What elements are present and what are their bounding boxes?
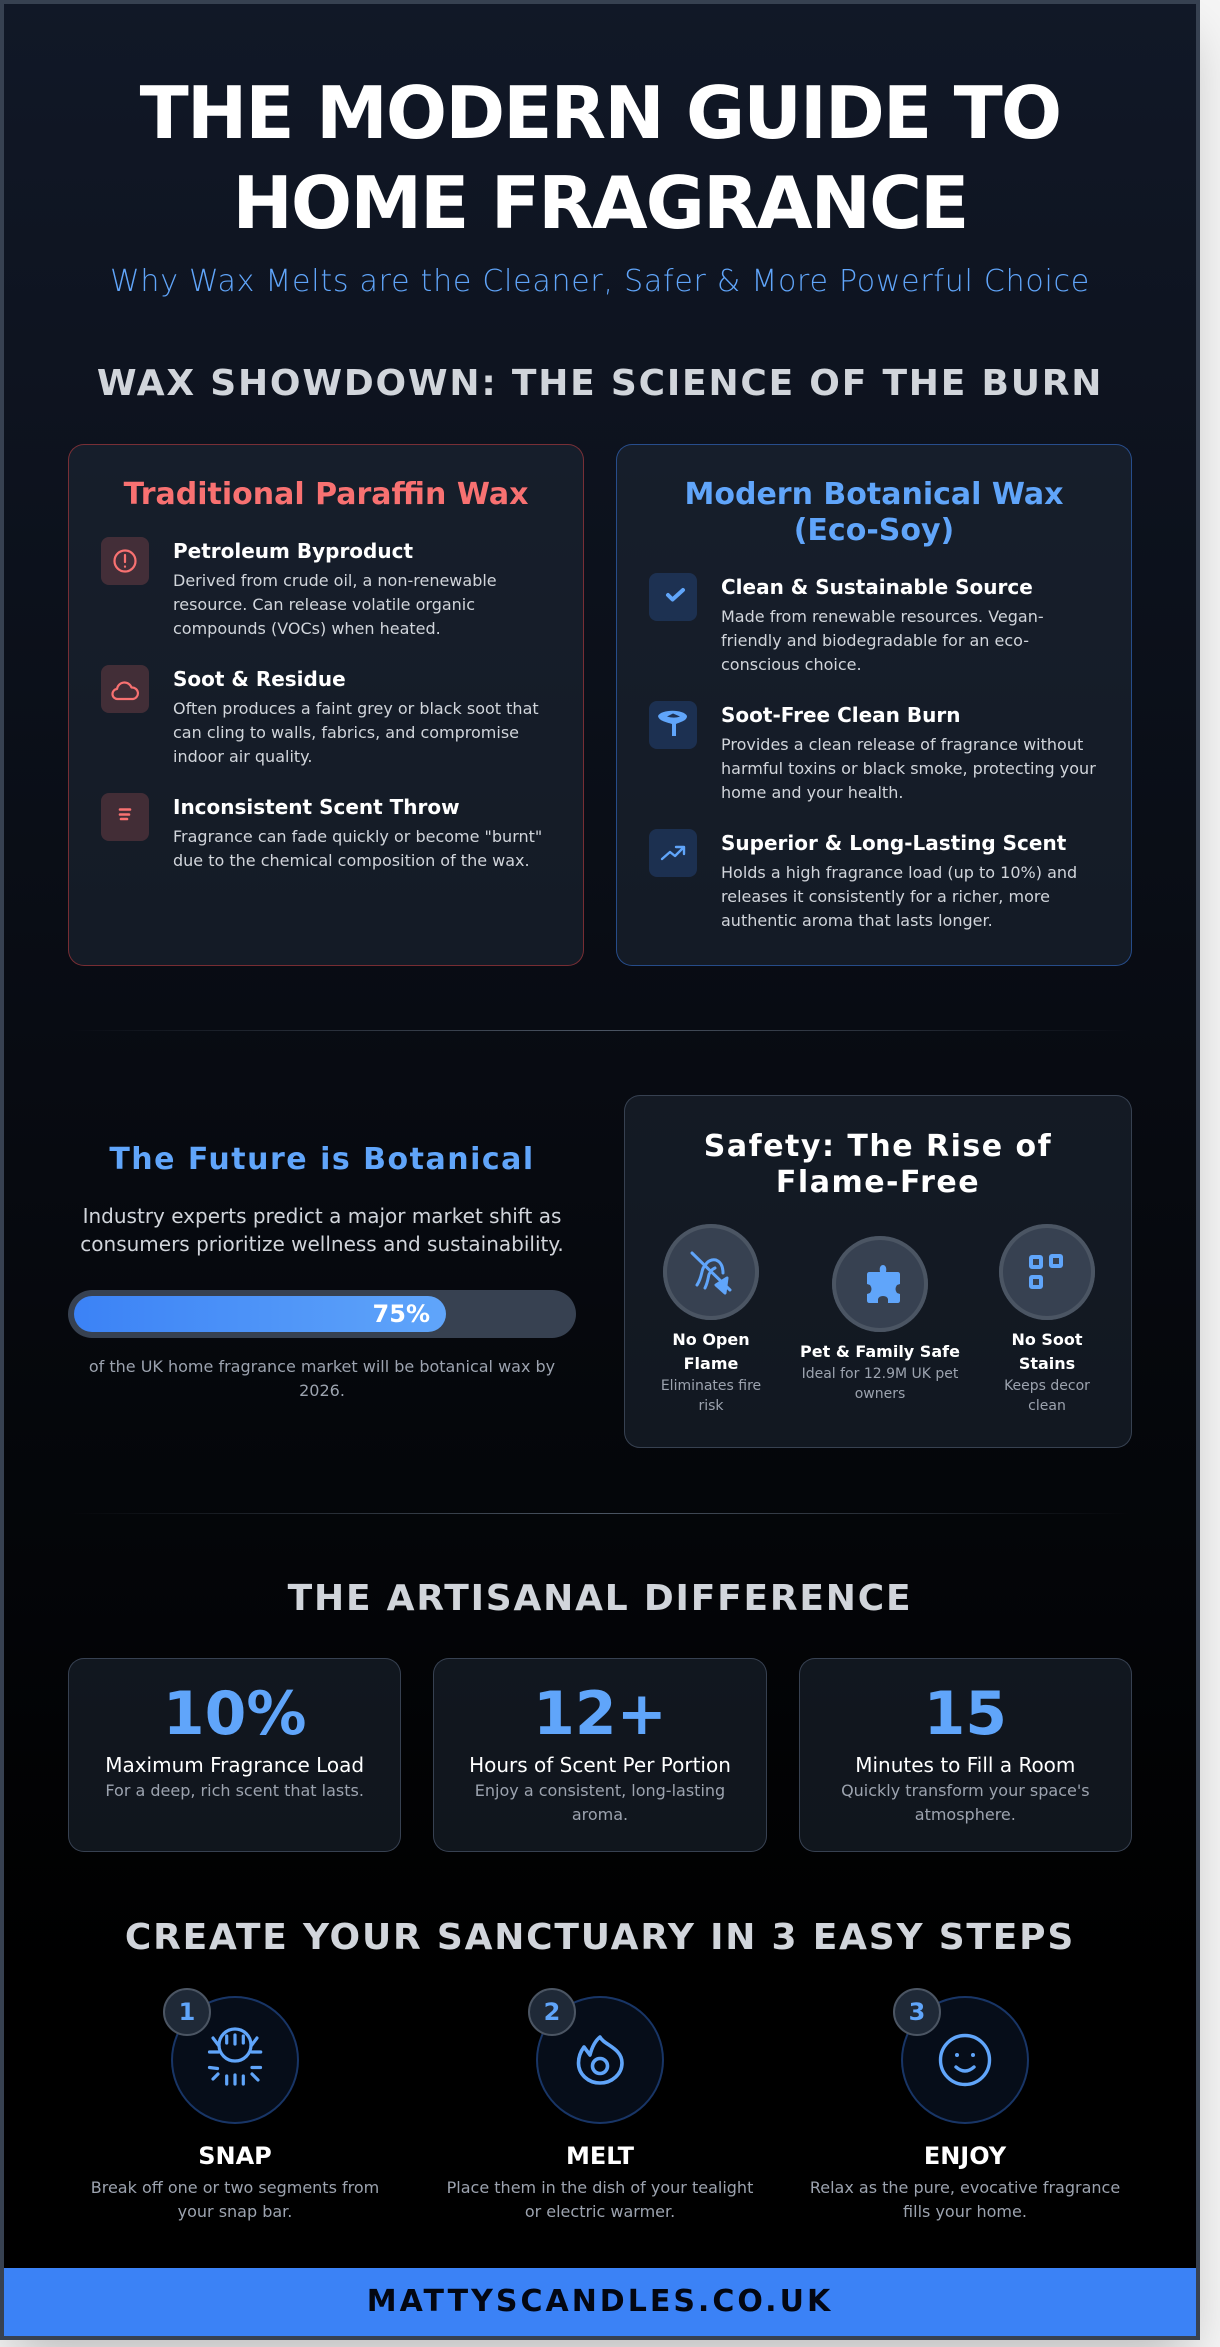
badge 2: 2 xyxy=(544,1998,560,2026)
note: Eliminates fire xyxy=(661,1378,761,1394)
icon: step 3 enjoy xyxy=(901,1996,1029,2124)
step 2 text xyxy=(447,2178,753,2221)
label xyxy=(672,1330,750,1373)
title: THE MODERN GUIDE TO xyxy=(140,71,1060,155)
note: Ideal for 12.9M UK pet xyxy=(802,1366,958,1382)
icon: step 1 snap xyxy=(171,1996,299,2124)
label: Stains xyxy=(1019,1354,1075,1373)
icon: step 2 melt xyxy=(536,1996,664,2124)
item description: home and your health. xyxy=(721,783,903,802)
percentage value: 75% xyxy=(373,1300,430,1328)
label xyxy=(1011,1330,1083,1373)
item description: Made from renewable resources. Vegan- xyxy=(721,607,1044,626)
safety heading: Flame-Free xyxy=(776,1165,980,1200)
stat label: Minutes to Fill a Room xyxy=(855,1753,1075,1777)
paraffin heading: Traditional Paraffin Wax xyxy=(124,477,528,512)
note xyxy=(802,1366,958,1402)
stat card: hours of scent xyxy=(433,1658,767,1852)
item description: Provides a clean release of fragrance without xyxy=(721,735,1083,754)
icon: exclamation circle xyxy=(101,537,149,585)
footer bar xyxy=(4,2268,1196,2336)
safety heading xyxy=(704,1129,1052,1200)
step 2 text: or electric warmer. xyxy=(525,2202,675,2221)
botanical heading: Modern Botanical Wax xyxy=(685,477,1063,512)
progress bar 75 percent xyxy=(68,1290,576,1338)
item description: friendly and biodegradable for an eco- xyxy=(721,631,1029,650)
step 3 text: Relax as the pure, evocative fragrance xyxy=(810,2178,1120,2197)
botanical heading: (Eco-Soy) xyxy=(794,513,954,548)
stat card: minutes to fill xyxy=(799,1658,1132,1852)
step 2 title: MELT xyxy=(566,2142,634,2170)
safety item: pet and family safe xyxy=(800,1236,960,1402)
step 3 text: fills your home. xyxy=(903,2202,1027,2221)
label: Flame xyxy=(684,1354,738,1373)
stat note: Quickly transform your space's xyxy=(841,1781,1090,1800)
market shift text xyxy=(80,1204,564,1256)
badge 2 xyxy=(528,1988,576,2036)
item heading: Petroleum Byproduct xyxy=(173,539,413,563)
safety item: no open flame xyxy=(661,1224,761,1414)
panel: modern botanical wax xyxy=(616,444,1132,966)
step 2 text: Place them in the dish of your tealight xyxy=(447,2178,753,2197)
item heading: Soot & Residue xyxy=(173,667,346,691)
item: clean and sustainable source xyxy=(649,573,1044,674)
panel: safety xyxy=(624,1095,1132,1448)
stat note xyxy=(475,1781,725,1824)
icon: fading lines xyxy=(101,793,149,841)
panel: traditional paraffin wax xyxy=(68,444,584,966)
panel: future is botanical xyxy=(68,1142,576,1400)
step 1 title: SNAP xyxy=(198,2142,272,2170)
item description: harmful toxins or black smoke, protecting your xyxy=(721,759,1096,778)
step 3 text xyxy=(810,2178,1120,2221)
item description: resource. Can release volatile organic xyxy=(173,595,475,614)
step 1 text xyxy=(91,2178,379,2221)
heading: wax showdown: WAX SHOWDOWN: THE SCIENCE OF THE BURN xyxy=(97,363,1103,404)
stat label: Hours of Scent Per Portion xyxy=(469,1753,731,1777)
item description: can cling to walls, fabrics, and compromise xyxy=(173,723,519,742)
badge 3 xyxy=(893,1988,941,2036)
item description: Fragrance can fade quickly or become "burnt" xyxy=(173,827,542,846)
stat note: atmosphere. xyxy=(915,1805,1016,1824)
stat value: 10% xyxy=(163,1679,306,1749)
market shift text: consumers prioritize wellness and sustainability. xyxy=(80,1232,564,1256)
item: petroleum byproduct xyxy=(101,537,497,638)
icon: trending up xyxy=(649,829,697,877)
item description: indoor air quality. xyxy=(173,747,312,766)
icon: puzzle piece xyxy=(832,1236,928,1332)
item heading: Clean & Sustainable Source xyxy=(721,575,1033,599)
badge 1: 1 xyxy=(179,1998,195,2026)
item description: conscious choice. xyxy=(721,655,862,674)
item description: Holds a high fragrance load (up to 10%) and xyxy=(721,863,1077,882)
progress caption: 2026. xyxy=(299,1381,345,1400)
item description xyxy=(721,735,1096,802)
step 1 text: Break off one or two segments from xyxy=(91,2178,379,2197)
heading: artisanal difference: THE ARTISANAL DIFFERENCE xyxy=(288,1578,912,1619)
item: soot and residue xyxy=(101,665,539,766)
footer website: MATTYSCANDLES.CO.UK xyxy=(367,2284,833,2319)
item description xyxy=(173,571,497,638)
icon: squares xyxy=(999,1224,1095,1320)
stat label: Maximum Fragrance Load xyxy=(105,1753,364,1777)
stat card: fragrance load xyxy=(68,1658,401,1852)
item description xyxy=(721,863,1077,930)
icon: cloud xyxy=(101,665,149,713)
market shift text: Industry experts predict a major market shift as xyxy=(83,1204,561,1228)
stat note: aroma. xyxy=(572,1805,628,1824)
progress caption xyxy=(89,1357,555,1400)
note: owners xyxy=(855,1386,905,1402)
stat value: 15 xyxy=(924,1679,1007,1749)
heading: future: The Future is Botanical xyxy=(109,1142,535,1177)
stat note: Enjoy a consistent, long-lasting xyxy=(475,1781,725,1800)
item heading: Soot-Free Clean Burn xyxy=(721,703,960,727)
icon: no flame xyxy=(663,1224,759,1320)
badge 3: 3 xyxy=(909,1998,925,2026)
item description xyxy=(173,699,539,766)
note xyxy=(661,1378,761,1414)
progress caption: of the UK home fragrance market will be botanical wax by xyxy=(89,1357,555,1376)
item description: authentic aroma that lasts longer. xyxy=(721,911,993,930)
icon: clean burn xyxy=(649,701,697,749)
stat note xyxy=(841,1781,1090,1824)
item description: Often produces a faint grey or black soot that xyxy=(173,699,539,718)
note: risk xyxy=(698,1398,724,1414)
item: inconsistent scent throw xyxy=(101,793,542,870)
note: Keeps decor xyxy=(1004,1378,1090,1394)
step 1 text: your snap bar. xyxy=(178,2202,292,2221)
botanical heading xyxy=(685,477,1063,548)
item description: Derived from crude oil, a non-renewable xyxy=(173,571,497,590)
safety item: no soot stains xyxy=(999,1224,1095,1414)
item heading: Inconsistent Scent Throw xyxy=(173,795,460,819)
subtitle: Why Wax Melts are the Cleaner, Safer & More Powerful Choice xyxy=(110,264,1090,299)
item description: due to the chemical composition of the wax. xyxy=(173,851,530,870)
icon: check xyxy=(649,573,697,621)
title: HOME FRAGRANCE xyxy=(232,161,968,245)
label: Pet & Family Safe xyxy=(800,1342,960,1361)
heading: three steps: CREATE YOUR SANCTUARY IN 3 EASY STEPS xyxy=(125,1917,1075,1958)
progress fill xyxy=(74,1296,446,1332)
item heading: Superior & Long-Lasting Scent xyxy=(721,831,1066,855)
title xyxy=(140,71,1060,245)
note: clean xyxy=(1028,1398,1066,1414)
item description: releases it consistently for a richer, more xyxy=(721,887,1050,906)
item description: compounds (VOCs) when heated. xyxy=(173,619,441,638)
stat note: For a deep, rich scent that lasts. xyxy=(105,1781,364,1800)
step 3 title: ENJOY xyxy=(924,2142,1006,2170)
item: superior scent xyxy=(649,829,1077,930)
safety heading: Safety: The Rise of xyxy=(704,1129,1052,1164)
note xyxy=(1004,1378,1090,1414)
stat value: 12+ xyxy=(533,1679,667,1749)
item description xyxy=(721,607,1044,674)
item description xyxy=(173,827,542,870)
badge 1 xyxy=(163,1988,211,2036)
label: No Soot xyxy=(1011,1330,1083,1349)
label: No Open xyxy=(672,1330,750,1349)
item: soot-free clean burn xyxy=(649,701,1096,802)
